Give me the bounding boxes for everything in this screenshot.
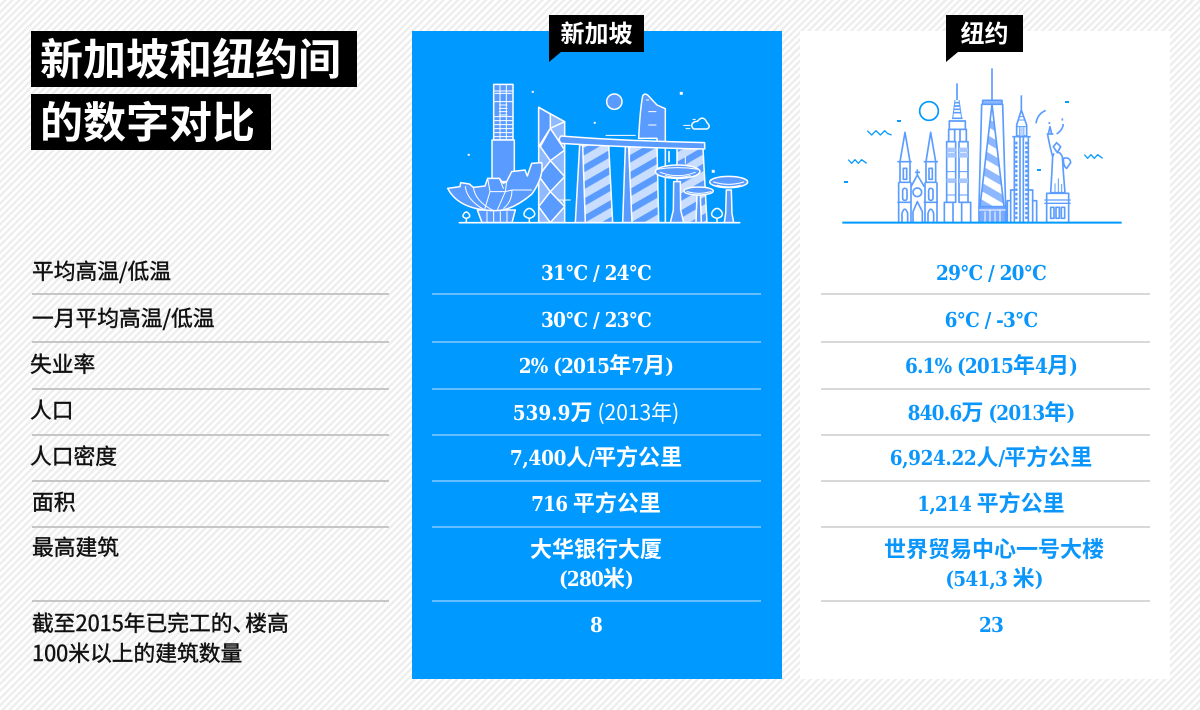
value: area: 1,214 平方公里 bbox=[917, 486, 1065, 518]
illustration: Singapore skyline bbox=[446, 84, 748, 224]
value: average temperature: 29°C / 20°C bbox=[936, 261, 1046, 285]
value: buildings count: 8 bbox=[590, 613, 602, 637]
sun bbox=[607, 94, 622, 109]
value: density: 7,400人/平方公里 bbox=[510, 440, 682, 472]
label: average temperature: 平均高温/低温 bbox=[32, 255, 171, 286]
label: buildings over 100m: 100米以上的建筑数量 bbox=[32, 637, 242, 668]
value: area: 716 平方公里 bbox=[531, 486, 661, 518]
decorative dots bbox=[468, 91, 715, 173]
label: unemployment: 失业率 bbox=[30, 348, 95, 379]
cloud bbox=[684, 118, 709, 129]
title bbox=[31, 26, 357, 151]
supertree 3 bbox=[710, 176, 748, 223]
value: tallest building: 世界贸易中心一号大楼 bbox=[884, 532, 1104, 564]
cathedral bbox=[897, 132, 938, 223]
hotel tower 1 bbox=[575, 145, 613, 223]
ground line bbox=[459, 220, 740, 225]
label: tallest building: 最高建筑 bbox=[32, 531, 119, 562]
value: January temperature: 30°C / 23°C bbox=[541, 308, 651, 332]
value: tallest building: (280米) bbox=[559, 560, 633, 592]
panel: Singapore bbox=[412, 31, 782, 679]
value: unemployment: 2% (2015年7月) bbox=[519, 348, 673, 380]
value: unemployment: 6.1% (2015年4月) bbox=[905, 348, 1077, 380]
illustration: New York skyline bbox=[842, 68, 1122, 224]
waves and dashes bbox=[844, 102, 1103, 182]
label: buildings over 100m: 截至2015年已完工的、楼高 bbox=[32, 607, 289, 638]
hotel tower 3 bbox=[677, 147, 707, 223]
tower: curved tower bbox=[639, 94, 669, 223]
ArtScience Museum bbox=[448, 163, 542, 223]
supertree 2 bbox=[684, 187, 713, 223]
value: buildings count: 23 bbox=[979, 613, 1003, 637]
tab: New York bbox=[946, 15, 1023, 52]
title line 1: 新加坡和纽约间 bbox=[40, 26, 341, 88]
hotel tower 2 bbox=[623, 147, 659, 223]
value: tallest building bbox=[884, 532, 1104, 592]
Chrysler Building bbox=[1007, 95, 1037, 223]
tab: New York: 纽约 bbox=[960, 14, 1008, 49]
value: population: 539.9万 (2013年) bbox=[513, 395, 679, 427]
value: average temperature: 31°C / 24°C bbox=[541, 261, 651, 285]
tower: OCBC bbox=[492, 84, 514, 182]
label: population density: 人口密度 bbox=[30, 440, 117, 471]
Statue of Liberty bbox=[1036, 110, 1071, 223]
sky bridge bbox=[559, 135, 705, 149]
Empire State Building bbox=[944, 83, 971, 223]
tab: Singapore: 新加坡 bbox=[560, 14, 632, 49]
panel: row labels bbox=[30, 255, 389, 668]
small trees bbox=[463, 200, 722, 223]
value: January temperature: 6°C / -3°C bbox=[945, 308, 1037, 332]
value: tallest building: (541,3 米) bbox=[945, 560, 1043, 592]
title line 2: 的数字对比 bbox=[40, 89, 255, 151]
value: population: 840.6万 (2013年) bbox=[908, 395, 1074, 427]
supertree 1 bbox=[655, 165, 700, 223]
panel: New York bbox=[800, 31, 1170, 679]
label: January temperature: 一月平均高温/低温 bbox=[32, 302, 215, 333]
sun bbox=[920, 102, 938, 120]
value: tallest building bbox=[530, 532, 662, 592]
One World Trade Center bbox=[979, 68, 1006, 223]
value: tallest building: 大华银行大厦 bbox=[530, 532, 662, 564]
tower: Bank of China bbox=[539, 107, 565, 223]
ground line bbox=[842, 220, 1122, 226]
label: area: 面积 bbox=[32, 486, 76, 517]
value: density: 6,924.22人/平方公里 bbox=[890, 440, 1092, 472]
label: buildings over 100m bbox=[32, 607, 289, 668]
tab: Singapore bbox=[549, 15, 644, 52]
label: population: 人口 bbox=[30, 394, 74, 425]
